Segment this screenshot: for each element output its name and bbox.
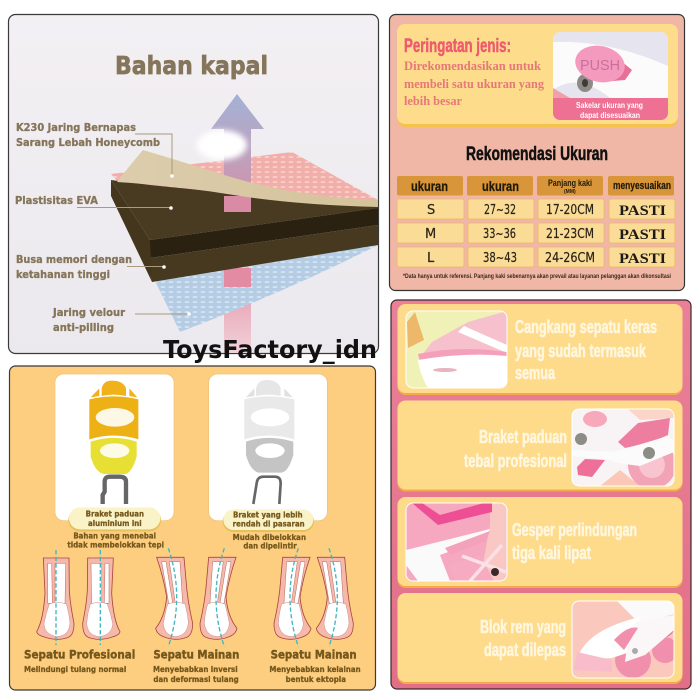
warning text <box>404 59 545 108</box>
row M <box>397 223 675 243</box>
callout: size warning <box>397 24 678 127</box>
text: aluminium description: tidak membelokkan tepi <box>67 540 164 549</box>
label pill: cheap bracket: rendah di pasaran <box>233 520 305 529</box>
table header: Panjang kaki <box>548 178 592 188</box>
text: cheap description <box>233 533 306 551</box>
photo: bracket <box>572 409 676 489</box>
heading: size recommendation: Rekomendasi Ukuran <box>466 144 608 165</box>
foot diagram: inversion <box>156 548 237 647</box>
label pill: cheap bracket <box>223 509 314 532</box>
table header: ukuran <box>482 178 519 194</box>
caption: inversion <box>153 647 239 684</box>
text: alloy bracket: Braket paduan <box>479 427 567 447</box>
caption: inversion: dan deformasi tulang <box>153 675 239 684</box>
photo: buckle <box>406 503 507 581</box>
row L <box>397 247 675 267</box>
caption: inversion: Sepatu Mainan <box>153 647 239 661</box>
panel: size guide <box>390 14 684 290</box>
label: velour mesh <box>52 307 191 334</box>
table header: ukuran <box>411 178 448 194</box>
table header: menyesuaikan <box>613 180 671 192</box>
label: K230 mesh: K230 Jaring Bernapas <box>16 122 136 134</box>
text: buckle: Gesper perlindungan <box>512 520 637 540</box>
text: hard shell: yang sudah termasuk <box>515 341 647 361</box>
warning text: Direkomendasikan untuk <box>404 59 541 73</box>
text: cheap description: Mudah dibelokkan <box>233 533 306 542</box>
text: brake: dapat dilepas <box>484 640 566 660</box>
text: cheap description: dan dipelintir <box>243 542 297 551</box>
photo: push switch: PUSH <box>580 57 620 74</box>
caption: ectopia: Menyebabkan kelainan <box>269 665 361 674</box>
photo: push switch <box>553 32 668 120</box>
card: aluminium bracket <box>55 374 174 521</box>
photo: push switch: Sakelar ukuran yang <box>576 101 643 110</box>
caption: ectopia <box>269 647 361 684</box>
size table <box>397 176 675 267</box>
warning text: lebih besar <box>404 94 462 108</box>
text: alloy bracket: tebal profesional <box>464 451 567 471</box>
feature card: brake <box>398 593 682 684</box>
text: hard shell <box>515 317 657 383</box>
row L: L <box>427 251 435 266</box>
photo: shell <box>406 311 507 388</box>
text: brake <box>480 617 566 660</box>
label: velour mesh: Jaring velour <box>52 307 126 319</box>
row L: 24-26CM <box>545 251 595 266</box>
label: velour mesh: anti-pilling <box>53 322 114 334</box>
caption: ectopia: bentuk ektopia <box>286 675 346 684</box>
card: cheap bracket <box>209 374 327 521</box>
watermark: ToysFactory_idn <box>163 335 377 364</box>
label pill: aluminium bracket: Braket paduan <box>86 510 144 519</box>
label: K230 mesh <box>16 122 174 178</box>
foot diagram: ectopia <box>274 548 353 647</box>
label pill: aluminium bracket <box>68 507 161 531</box>
label: EVA: Plastisitas EVA <box>15 195 99 207</box>
row M: 21-23CM <box>546 227 594 242</box>
row S: S <box>427 203 435 218</box>
row M: 33~36 <box>483 227 516 242</box>
table header: (MM) <box>564 189 576 195</box>
panel: shoe material <box>8 14 378 354</box>
row S: 27~32 <box>484 203 516 218</box>
text: buckle <box>512 520 637 563</box>
row L: PASTI <box>619 251 666 267</box>
label: memory foam: ketahanan tinggi <box>16 269 110 281</box>
caption: ectopia: Sepatu Mainan <box>271 647 357 661</box>
heading: Bahan kapal: Bahan kapal <box>115 51 268 80</box>
text: hard shell: semua <box>515 363 556 383</box>
caption: professional: Sepatu Profesional <box>24 647 135 661</box>
label: memory foam <box>16 254 166 281</box>
warning text: membeli satu ukuran yang <box>404 77 545 91</box>
label: EVA <box>15 195 173 210</box>
label: K230 mesh: Sarang Lebah Honeycomb <box>16 137 160 149</box>
text: aluminium description <box>67 531 164 549</box>
panel: features <box>391 300 691 689</box>
row M: PASTI <box>619 227 666 243</box>
feature card: hard shell <box>398 304 682 395</box>
panel: bracket comparison <box>10 366 376 690</box>
photo: push switch: dapat disesuaikan <box>580 111 640 120</box>
row L: 38~43 <box>483 251 517 266</box>
row S <box>397 199 675 219</box>
caption: professional: Melindungi tulang normal <box>24 665 126 674</box>
feature card: buckle <box>398 497 682 588</box>
warning heading: Peringatan jenis: <box>404 36 511 57</box>
text: aluminium description: Bahan yang menebal <box>73 531 156 540</box>
row S: PASTI <box>619 203 666 219</box>
caption: inversion: Menyebabkan inversi <box>153 665 238 674</box>
foot diagram: professional <box>37 550 120 645</box>
feature card: alloy bracket <box>398 400 682 492</box>
row M: M <box>425 227 436 242</box>
row S: 17-20CM <box>546 203 594 218</box>
caption: professional <box>24 647 135 674</box>
label: memory foam: Busa memori dengan <box>16 254 132 266</box>
material layers diagram <box>111 94 378 354</box>
photo: brake <box>572 601 678 678</box>
text: buckle: tiga kali lipat <box>512 543 591 563</box>
label pill: aluminium bracket: aluminium ini <box>88 519 142 528</box>
text: alloy bracket <box>464 427 567 471</box>
table header <box>397 176 674 196</box>
text: brake: Blok rem yang <box>480 617 566 637</box>
label pill: cheap bracket: Braket yang lebih <box>233 511 303 520</box>
